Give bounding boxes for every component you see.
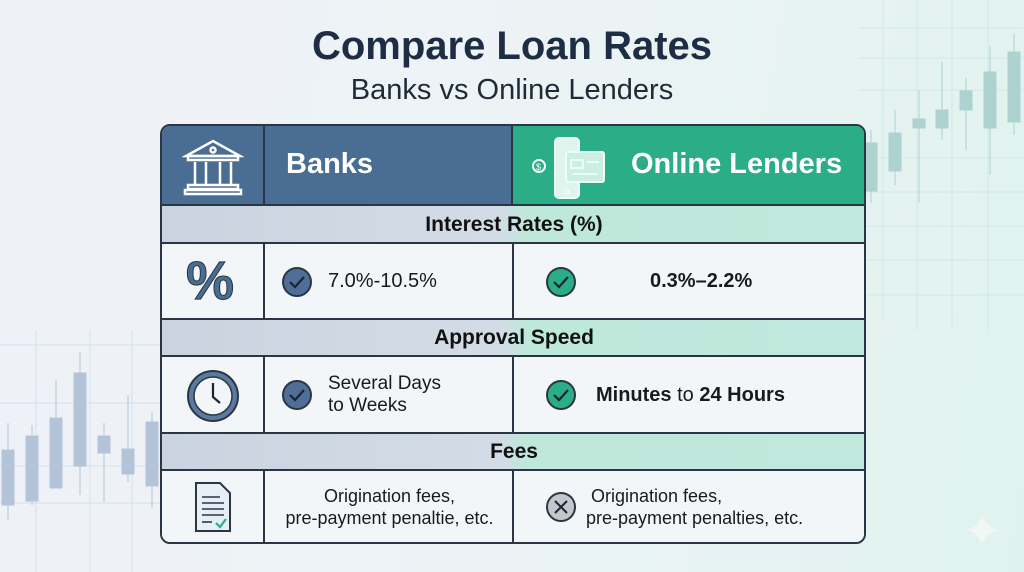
icon: x mark: [546, 492, 576, 522]
check: online: [546, 380, 576, 410]
check: online: [546, 267, 576, 297]
check: banks: [282, 267, 312, 297]
comparison table: [160, 124, 866, 544]
icon: clock: [187, 370, 239, 422]
row: fees: Origination fees,: [591, 486, 722, 506]
section: interest rates: Interest Rates (%): [425, 213, 603, 236]
icon: phone: [532, 137, 605, 199]
row: interest rates: 0.3%–2.2%: [650, 270, 752, 292]
icon: percent: %: [186, 251, 234, 311]
icon: phone: $: [536, 162, 541, 172]
title: Compare Loan Rates: [312, 24, 712, 68]
section: approval speed: Approval Speed: [434, 326, 594, 349]
section: fees: [162, 434, 866, 471]
header: online lenders: [513, 126, 868, 206]
row: approval speed: Several Days: [328, 373, 441, 394]
section: approval speed: [162, 320, 866, 357]
header: online lenders: Online Lenders: [631, 148, 842, 180]
row: interest rates: [162, 244, 864, 320]
row: approval speed: to Weeks: [328, 395, 407, 416]
header: banks: Banks: [286, 148, 373, 180]
check: banks: [282, 380, 312, 410]
row: fees: [162, 471, 864, 542]
icon: document: [195, 482, 231, 532]
row: interest rates: 7.0%-10.5%: [328, 270, 437, 292]
row: approval speed: Minutes to 24 Hours: [596, 384, 785, 406]
row: approval speed: [162, 357, 864, 434]
icon: bank building: [182, 140, 244, 196]
header: banks: [162, 126, 513, 206]
icon: sparkle: [966, 515, 998, 545]
section: fees: Fees: [490, 440, 538, 463]
row: fees: pre-payment penaltie, etc.: [285, 508, 494, 528]
row: fees: Origination fees,: [324, 486, 455, 506]
subtitle: Banks vs Online Lenders: [351, 74, 673, 106]
section: interest rates: [162, 206, 866, 244]
row: fees: pre-payment penalties, etc.: [586, 508, 803, 528]
